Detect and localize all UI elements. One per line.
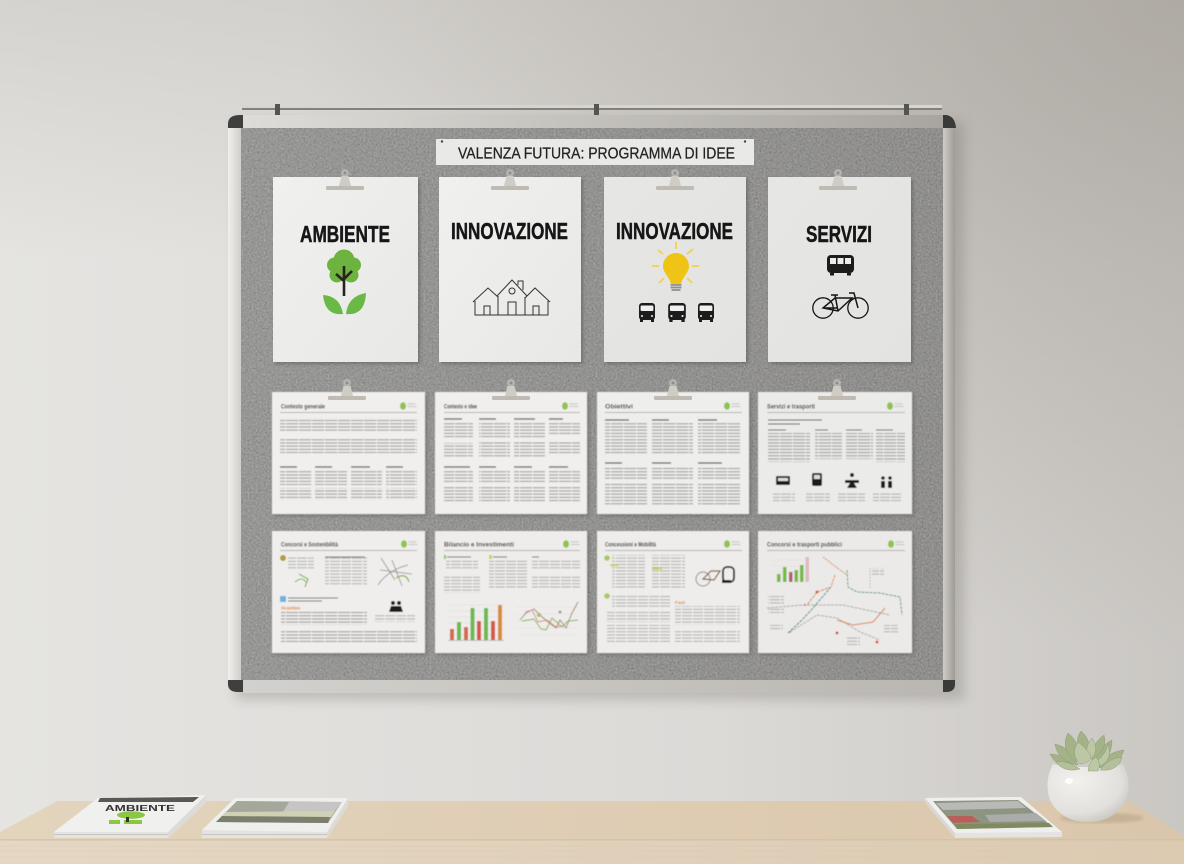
document: sustainability with map [272, 531, 427, 655]
icon: bicycle [813, 293, 868, 318]
poster: Ambiente [273, 177, 420, 364]
icon captions [773, 493, 795, 502]
brochure: landscape cover [202, 798, 348, 838]
document: concessions and bike [597, 531, 751, 655]
clips: poster row [326, 169, 857, 190]
brochure: Ambiente [54, 795, 206, 838]
title strip [436, 139, 754, 165]
heading: Concorsi e trasporti pubblici [767, 542, 842, 548]
aluminium frame [228, 115, 956, 693]
body text [612, 555, 645, 588]
icons: services [776, 473, 892, 488]
heading: Concorsi e Sostenibilità [281, 542, 338, 548]
mounting rail [242, 104, 942, 115]
heading: Concessioni e Mobilità [605, 542, 656, 548]
map sketch [378, 558, 412, 586]
mini bar chart [772, 557, 810, 582]
heading: SERVIZI [806, 221, 872, 247]
heading: Bilancio e Investimenti [444, 542, 514, 548]
document: services with icons [758, 392, 914, 516]
icon: houses [473, 280, 550, 315]
poster: Innovazione transit [604, 177, 748, 364]
clips: document row [328, 379, 856, 400]
body text [280, 418, 417, 431]
heading: Obiettivi [605, 404, 633, 410]
title strip: VALENZA FUTURA: PROGRAMMA DI IDEE [458, 146, 735, 162]
heading: Contesto e idee [444, 404, 477, 410]
bar chart [448, 605, 504, 641]
potted succulent [1048, 731, 1144, 823]
heading: Servizi e trasporti [767, 404, 815, 410]
document: transit map [758, 531, 914, 655]
notice board [228, 115, 956, 693]
heading: INNOVAZIONE [451, 218, 568, 244]
document: context and ideas [435, 392, 589, 516]
body text [768, 429, 893, 431]
icon: people [389, 601, 403, 612]
heading: INNOVAZIONE [616, 218, 733, 244]
document: objectives [597, 392, 751, 516]
icons: transit vehicles [639, 303, 714, 322]
desk [0, 801, 1184, 864]
heading: Contesto generale [281, 404, 325, 410]
document: concessions and bike: Fasi [675, 600, 685, 605]
icon: bicycle photo [696, 567, 734, 586]
icon: light bulb [652, 242, 699, 290]
body text [605, 420, 722, 463]
pot [1048, 764, 1128, 822]
body text [444, 555, 446, 559]
transit network map [767, 557, 902, 645]
felt surface [240, 127, 944, 681]
document: budget charts [435, 531, 589, 655]
brochure: street cover [925, 797, 1062, 838]
line chart [516, 602, 578, 635]
lead text [768, 420, 822, 424]
notice board shadow [236, 122, 964, 700]
poster: Innovazione housing [439, 177, 583, 364]
icon: bus [827, 255, 854, 276]
icon: tree with leaves [323, 250, 366, 314]
heading: AMBIENTE [300, 221, 390, 247]
document: overview text [272, 392, 427, 516]
route sketch [295, 574, 308, 587]
poster: Servizi [768, 177, 913, 364]
brochure title: AMBIENTE [105, 804, 176, 813]
column headings [280, 466, 403, 468]
document: sustainability with map: Vita quotidiana [281, 606, 300, 610]
succulent [1050, 731, 1124, 771]
body text [444, 419, 568, 467]
pot shadow [1060, 813, 1144, 823]
body text [288, 557, 314, 569]
